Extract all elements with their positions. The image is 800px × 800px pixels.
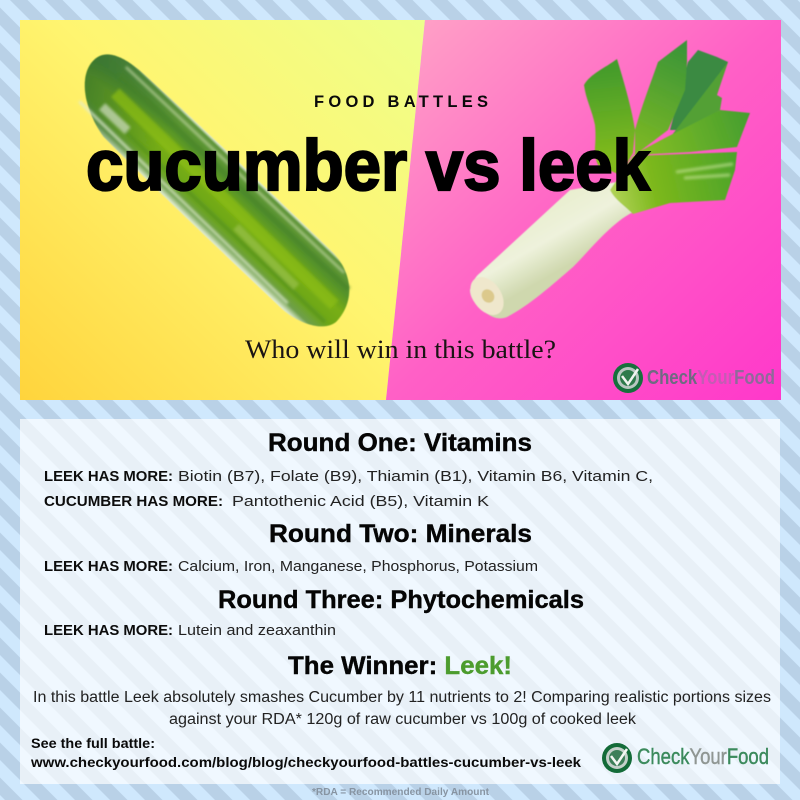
logo: footer [602,743,769,773]
footnote: *RDA = Recommended Daily Amount [312,787,490,798]
leek stalk [470,178,650,318]
text: food battles: FOOD BATTLES [314,93,488,111]
icon: cucumber [59,41,370,342]
text: leek phytochemicals: LEEK HAS MORE: [44,623,173,639]
logo: hero [613,363,775,393]
panel: hero banner [20,20,781,400]
panel: results: Pantothenic Acid (B5), Vitamin K [232,494,489,510]
panel: results: Biotin (B7), Folate (B9), Thiamin (B1), Vitamin B6, Vitamin C, [178,469,653,485]
logo: hero: CheckYourFood [647,367,775,389]
text: see the full battle link: See the full battle: [31,736,155,751]
text: who will win: Who will win in this battle? [245,335,556,364]
logo: footer: CheckYourFood [637,744,769,769]
leek dark inner leaves [670,50,728,130]
panel: results [20,419,780,784]
text: see the full battle link [30,736,582,770]
leek end cut [463,271,511,321]
leek middle leaf [633,110,750,155]
icon: leek [463,40,750,321]
text: summary: In this battle Leek absolutely smashes Cucumber by 11 nutrients to 2! Comparing realistic portions sizes [33,689,771,706]
yellow side [20,20,425,400]
leek fan leaf [635,40,687,155]
panel: results: Lutein and zeaxanthin [178,623,336,639]
pink side [386,20,781,400]
text: see the full battle link: www.checkyourfood.com/blog/blog/checkyourfood-battles-cucumber-vs-leek [30,755,582,770]
text: summary: against your RDA* 120g of raw cucumber vs 100g of cooked leek [169,711,636,728]
text: leek minerals: LEEK HAS MORE: [44,559,173,575]
title: cucumber vs leek: cucumber vs leek [86,127,650,206]
panel: results: Calcium, Iron, Manganese, Phosphorus, Potassium [178,559,538,575]
leek front leaf [610,152,737,214]
heading: round one: Round One: Vitamins [268,429,532,457]
heading: the winner: The Winner: Leek! [288,652,512,680]
heading: round three: Round Three: Phytochemicals [218,586,584,614]
text: summary [33,689,771,728]
text: leek vitamins: LEEK HAS MORE: [44,469,173,485]
leek back leaf [584,59,635,175]
heading: round two: Round Two: Minerals [269,520,532,548]
text: cucumber vitamins: CUCUMBER HAS MORE: [44,494,223,510]
